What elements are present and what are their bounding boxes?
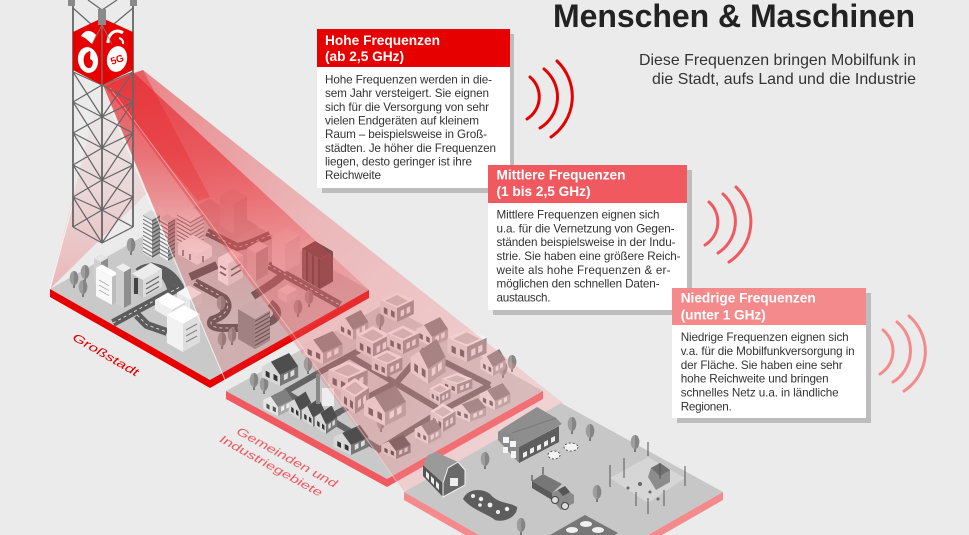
light beam: strong centre [104, 70, 210, 201]
icon: large barn [498, 407, 562, 463]
heading: (1 bis 2,5 GHz) [496, 184, 590, 199]
body text: vielen Endgeräten auf kleinem [325, 114, 479, 128]
building: far tower [210, 188, 258, 240]
heading [496, 168, 626, 199]
heading: (ab 2,5 GHz) [325, 49, 404, 64]
icon: truck [532, 467, 574, 510]
body text: hohe Reichweite und bringen [681, 373, 829, 386]
land trees [481, 417, 639, 535]
subtitle [639, 52, 916, 88]
icon: 5G badge: 5G [109, 53, 126, 68]
antenna cube with Vodafone logo and 5G [73, 9, 133, 85]
panel: Hohe Frequenzen [317, 29, 514, 193]
body text: städten. Je höher die Frequenzen [325, 142, 496, 155]
body text: weite als hohe Frequenzen & er- [496, 264, 671, 277]
icon: low frequency waves [880, 316, 925, 391]
icon: medium frequency waves [705, 187, 751, 262]
body text [325, 74, 496, 182]
body text: möglichen den schnellen Daten- [496, 278, 660, 291]
body text: Niedrige Frequenzen eignen sich [681, 331, 849, 344]
panel: Niedrige Frequenzen [672, 288, 871, 423]
body text: der Fläche. Sie haben eine sehr [681, 359, 843, 372]
subtitle: Diese Frequenzen bringen Mobilfunk in [639, 52, 916, 69]
body text: Regionen. [681, 401, 732, 414]
building: pale centre [218, 249, 243, 286]
body text [681, 331, 855, 414]
building: wide patterned [132, 263, 162, 298]
light beam: medium city [103, 72, 369, 380]
heading: Mittlere Frequenzen [496, 168, 626, 182]
icon: high frequency waves [527, 61, 572, 137]
building: striped twin towers [143, 210, 175, 261]
building: left grey block [94, 254, 108, 287]
building: dark block [302, 241, 333, 289]
building: small box [278, 284, 297, 303]
body text [496, 208, 681, 304]
city roads [113, 232, 340, 332]
heading: (unter 1 GHz) [681, 307, 766, 322]
village trees [250, 313, 516, 432]
tower connectors [68, 0, 137, 6]
building: flat pad with pillars [178, 235, 212, 265]
panel: Mittlere Frequenzen [488, 165, 692, 315]
light cone: left side behind city [50, 85, 148, 289]
body text: v.a. für die Mobilfunkversorgung in [681, 345, 855, 358]
light beam: wide pale [105, 70, 563, 492]
body text: sem Jahr versteigert. Sie eignen [325, 87, 489, 100]
subtitle: die Stadt, aufs Land und die Industrie [652, 71, 916, 88]
building: grey slab [116, 263, 131, 308]
building: tall striped [177, 206, 204, 250]
plate: land [404, 403, 723, 535]
body text: Reichweite [325, 169, 381, 182]
city trees [70, 238, 313, 349]
icon: animal pen [550, 515, 618, 535]
heading [325, 33, 440, 64]
village roads [285, 350, 490, 451]
icon: pasture with animals [463, 490, 517, 521]
body text: ständen beispielsweise in der Indu- [496, 236, 676, 249]
label: Großstadt: Großstadt [69, 332, 142, 379]
building: white cluster [155, 286, 202, 352]
body text: liegen, desto geringer ist ihre [325, 156, 472, 168]
body text: Mittlere Frequenzen eignen sich [496, 208, 660, 221]
heading: Niedrige Frequenzen [681, 291, 816, 306]
tower lattice [73, 0, 133, 243]
body text: strie. Sie haben eine größere Reich- [496, 250, 681, 263]
building: left white block [96, 264, 118, 305]
body text: schnelles Netz u.a. in ländliche [681, 387, 839, 400]
heading: Hohe Frequenzen [325, 33, 440, 48]
village houses [262, 292, 510, 459]
icon: signal marks on cube top [81, 31, 123, 44]
icon: small barn [423, 452, 465, 497]
building: pink tower [247, 241, 268, 281]
plate: Großstadt [50, 188, 369, 388]
body text: Hohe Frequenzen werden in die- [325, 74, 492, 86]
label: Gemeinden und Industriegebiete: Industriegebiete [216, 434, 326, 499]
label: Gemeinden und Industriegebiete: Gemeinden und [233, 425, 341, 490]
icon: Vodafone logo [76, 45, 100, 75]
icon: chicken coop with fence [610, 442, 685, 514]
body text: austausch. [496, 292, 550, 304]
building: grey tower [238, 300, 270, 349]
body text: Raum – beispielsweise in Groß- [325, 128, 487, 141]
body text: sich für die Versorgung von sehr [325, 101, 489, 114]
beam edge lines [50, 88, 404, 492]
plate: Gemeinden und Industriegebiete [226, 292, 543, 487]
body text: u.a. für die Vernetzung von Gegen- [496, 222, 675, 236]
heading [681, 291, 816, 322]
icon: cows [548, 443, 578, 459]
building: long block [272, 228, 300, 272]
